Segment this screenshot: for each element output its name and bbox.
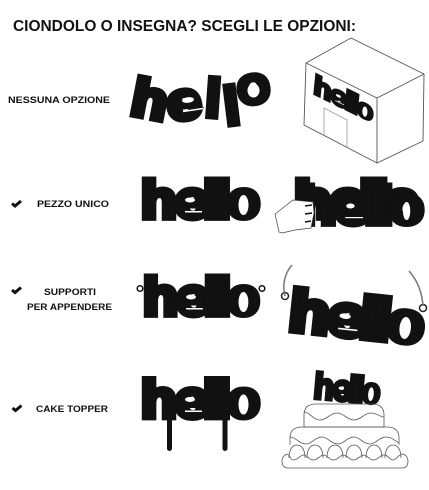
illustration: shop box with sign: l [350,88,360,121]
icon: check mark supporti [12,288,21,292]
illustration: shop box with sign: e [329,78,349,116]
illustration: cake with topper: e [331,368,354,409]
hello with loose tilted letters: l [221,77,243,137]
label: supporti per appendere [27,287,112,313]
icon: check mark cake topper [12,406,22,410]
hello single piece: h [141,170,177,229]
illustration: hand holding hello: h [299,177,336,236]
hello single piece [141,170,260,230]
illustration: hand holding hello: l [359,170,375,230]
hello cake topper with legs: o [227,370,260,429]
illustration: shop box with sign: h [312,70,333,108]
icon: check mark pezzo unico [12,201,21,206]
label: supporti per appendere: PER APPENDERE [27,302,112,313]
hello single piece: e [175,171,209,230]
label: nessuna opzione: NESSUNA OPZIONE [8,95,110,106]
hello with hanging holes [137,267,265,327]
illustration: hand holding hello: o [384,170,419,230]
illustration: cake with topper: l [347,368,359,409]
hello cake topper with legs: h [141,370,177,429]
illustration: hanging hello sign: l [371,286,395,353]
hello single piece: l [216,171,231,230]
illustration: shop box with sign [304,38,424,163]
illustration: hanging hello sign: l [357,285,380,352]
label: pezzo unico: PEZZO UNICO [37,199,109,210]
illustration: hanging hello sign [282,265,428,357]
title: CIONDOLO O INSEGNA? SCEGLI LE OPZIONI: [13,18,356,35]
hello with hanging holes: l [216,269,231,327]
illustration: cake with topper [282,365,408,468]
illustration: hand holding hello: l [364,176,380,236]
hello with hanging holes: e [176,267,210,326]
hello cake topper with legs: l [203,370,218,430]
illustration: hand holding hello: l [378,176,393,236]
hello with loose tilted letters: e [163,70,204,133]
hello with loose tilted letters: l [204,69,222,129]
hello with hanging holes: h [143,267,178,327]
hello with hanging holes: l [204,269,218,327]
illustration: hand holding hello: l [373,170,388,230]
hello cake topper with legs: l [216,370,231,430]
illustration: hanging hello sign: e [325,282,370,351]
hello with loose tilted letters: h [127,67,173,132]
illustration: hand holding hello: o [389,176,424,236]
illustration: shop box with sign: o [355,91,375,129]
hello single piece: o [227,171,260,230]
illustration: hanging hello sign: h [286,278,333,347]
illustration: hand holding hello: e [335,177,370,236]
illustration: cake with topper: l [354,369,366,410]
label: supporti per appendere: SUPPORTI [44,287,96,298]
hello with loose tilted letters: o [232,54,274,117]
illustration: shop box with sign: l [344,85,354,118]
hello with loose tilted letters [127,54,274,137]
hello cake topper with legs [141,370,260,451]
illustration: cake with topper: o [360,371,382,412]
illustration: hand holding hello: e [330,171,365,230]
label: cake topper: CAKE TOPPER [36,404,108,415]
illustration: hand holding hello: h [294,171,331,230]
hello single piece: l [203,171,218,230]
illustration: cake with topper: h [312,367,336,408]
hello with hanging holes: o [227,268,260,327]
illustration: hanging hello sign: o [384,287,428,357]
hello cake topper with legs: e [175,370,209,430]
illustration: hand holding hello [275,170,424,236]
